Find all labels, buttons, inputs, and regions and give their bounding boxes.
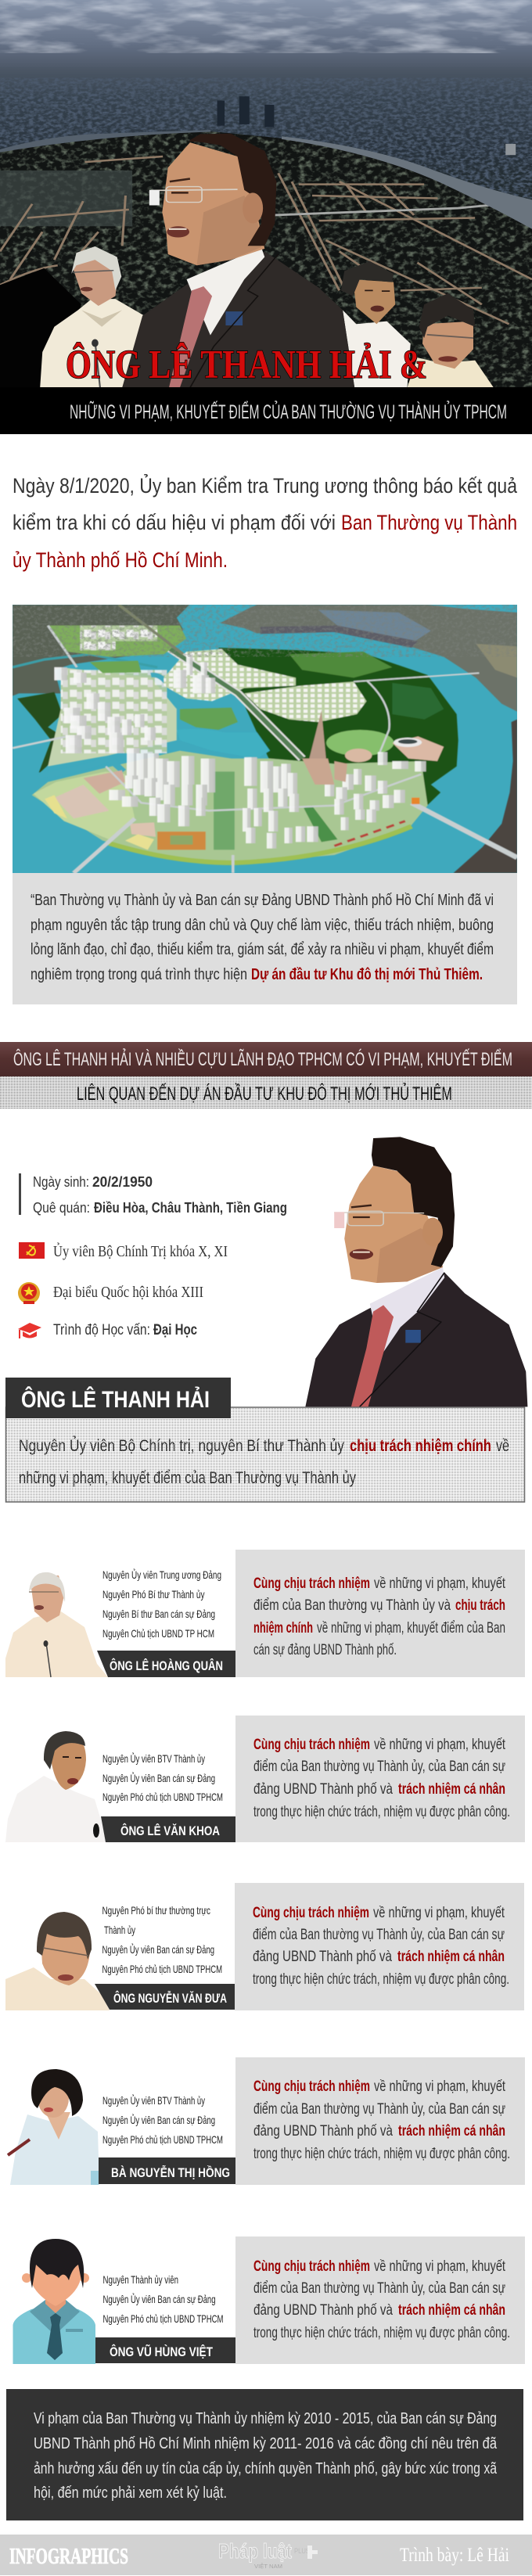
name plate <box>101 1816 235 1842</box>
job titles <box>103 2273 224 2325</box>
person row: Nguyen Van Dua <box>5 1883 524 2010</box>
responsibility panel <box>235 2057 525 2185</box>
job titles <box>102 1904 222 1975</box>
portrait <box>5 1912 110 2010</box>
footer label: INFOGRAPHICS <box>9 2545 128 2569</box>
responsibility panel: Cùng chịu trách nhiệm <box>253 2258 370 2275</box>
politburo text: Ủy viên Bộ Chính Trị khóa X, XI <box>53 1242 228 1260</box>
map: northwest garden district <box>48 626 186 657</box>
quote panel: nghiêm trọng trong quá trình thực hiện <box>31 966 247 983</box>
name plate: Le Thanh Hai <box>5 1378 231 1418</box>
map: southeast park and stadium <box>326 730 394 756</box>
description panel: những vi phạm, khuyết điểm của Ban Thường vụ Thành ủy <box>19 1469 356 1487</box>
job titles <box>102 2093 223 2146</box>
responsibility panel: điểm của Ban thường vụ Thành ủy và <box>253 1597 451 1614</box>
description panel <box>6 1407 524 1502</box>
person row: Vu Hung Viet <box>13 2236 525 2364</box>
map: southwest peninsula <box>34 771 135 839</box>
map: landmark tower <box>302 710 347 785</box>
job titles: Nguyên Phó bí thư thường trực <box>102 1904 210 1917</box>
name plate <box>95 2337 235 2363</box>
map: water channels <box>38 759 124 775</box>
education text: Đại Học <box>153 1322 197 1338</box>
national assembly text: Đại biểu Quốc hội khóa XIII <box>53 1284 203 1301</box>
job titles: Nguyên Ủy viên Ban cán sự Đảng <box>102 2113 215 2126</box>
job titles: Nguyên Phó Bí thư Thành ủy <box>102 1588 205 1601</box>
responsibility panel <box>235 1883 524 2010</box>
responsibility panel: chịu trách <box>455 1597 505 1614</box>
map: roads and bridges <box>13 605 517 873</box>
job titles: Nguyên Thành ủy viên <box>103 2273 178 2286</box>
quote panel <box>13 873 517 1004</box>
logo: PLUS <box>294 2547 310 2555</box>
portrait: Le Van Khoa <box>341 261 411 388</box>
title bar <box>0 387 532 434</box>
conclusion panel <box>6 2389 523 2520</box>
responsibility panel: nhiệm chính <box>253 1620 313 1636</box>
map: south shore planting <box>109 826 412 863</box>
portrait: Le Thanh Hai main <box>305 1137 527 1407</box>
responsibility panel: Cùng chịu trách nhiệm <box>253 1737 370 1753</box>
name plate: ÔNG VŨ HÙNG VIỆT <box>110 2344 213 2359</box>
profile facts: Quê quán: <box>33 1200 90 1216</box>
map: central boulevard <box>171 649 302 759</box>
intro paragraph: kiểm tra khi có dấu hiệu vi phạm đối với <box>13 511 336 534</box>
icon: party flag <box>19 1242 45 1259</box>
job titles: Nguyên Bí thư Ban cán sự Đảng <box>102 1608 215 1620</box>
title: ÔNG LÊ THANH HẢI & <box>66 342 427 387</box>
hero background: river and reclaimed land <box>0 130 532 388</box>
portrait: Le Hoang Quan <box>40 246 144 388</box>
job titles: Nguyên Phó chủ tịch UBND TPHCM <box>102 1791 223 1803</box>
name plate: BÀ NGUYỄN THỊ HỒNG <box>111 2165 230 2180</box>
job titles: Nguyên Ủy viên Ban cán sự Đảng <box>102 1942 214 1956</box>
education text: Trình độ Học vấn: <box>53 1322 150 1338</box>
logo: Pháp luật <box>218 2539 292 2563</box>
name plate <box>97 1651 235 1677</box>
job titles: Nguyên Ủy viên Trung ương Đảng <box>102 1568 221 1581</box>
name plate: Le Thanh Hai: ÔNG LÊ THANH HẢI <box>21 1386 210 1413</box>
profile facts: 20/2/1950 <box>92 1174 153 1190</box>
icon: national emblem <box>18 1282 40 1304</box>
conclusion panel: hội, đến mức phải xem xét kỷ luật. <box>34 2484 227 2502</box>
profile facts <box>19 1173 287 1216</box>
map: southern development ring <box>32 751 428 864</box>
person row: Nguyen Thi Hong <box>8 2057 525 2185</box>
description panel: chịu trách nhiệm chính <box>350 1437 491 1455</box>
responsibility panel: đảng UBND Thành phố và <box>253 1949 392 1965</box>
section heading band <box>0 1042 532 1109</box>
job titles: Nguyên Phó chủ tịch UBND TPHCM <box>103 2312 224 2325</box>
job titles <box>102 1568 221 1640</box>
responsibility panel: Cùng chịu trách nhiệm <box>253 1905 369 1921</box>
responsibility panel: đảng UBND Thành phố và <box>253 2302 393 2319</box>
job titles <box>102 1751 223 1803</box>
portrait <box>5 1572 108 1677</box>
map: northeast port district <box>220 605 517 712</box>
map: garden strip <box>214 771 235 850</box>
responsibility panel: Cùng chịu trách nhiệm <box>253 1575 370 1592</box>
responsibility panel: đảng UBND Thành phố và <box>253 1781 393 1798</box>
job titles: Nguyên Ủy viên Ban cán sự Đảng <box>102 1771 215 1784</box>
hero background: sky and city <box>0 0 532 235</box>
hero banner <box>0 0 532 434</box>
description panel: Nguyên Ủy viên Bộ Chính trị, nguyên Bí thư Thành ủy <box>19 1436 344 1455</box>
responsibility panel <box>235 2236 525 2364</box>
map: west mangrove <box>17 692 63 774</box>
description panel: về <box>496 1437 509 1455</box>
icon: avatar placeholder <box>13 2239 95 2364</box>
job titles: Thành ủy <box>104 1924 135 1936</box>
job titles: Nguyên Phó chủ tịch UBND TPHCM <box>102 2133 223 2146</box>
map: north central district <box>164 649 296 701</box>
map: central lagoon <box>177 729 270 759</box>
map: east neighbourhood <box>244 681 366 722</box>
responsibility panel <box>235 1716 525 1842</box>
map: west district <box>48 667 177 767</box>
job titles: Nguyên Phó chủ tịch UBND TPHCM <box>102 1963 222 1975</box>
portrait: Le Thanh Hai <box>122 134 354 388</box>
map: southeast shore <box>454 720 517 873</box>
profile facts: Điều Hòa, Châu Thành, Tiền Giang <box>94 1200 287 1216</box>
footer <box>0 2535 532 2575</box>
responsibility panel: đảng UBND Thành phố và <box>253 2123 393 2139</box>
project map image: Thu Thiem new urban area <box>13 605 517 873</box>
portrait: Nguyen Van Dua <box>407 293 494 388</box>
name plate <box>99 2157 235 2184</box>
person row: Le Hoang Quan <box>5 1550 525 1677</box>
job titles: Nguyên Ủy viên Ban cán sự Đảng <box>103 2292 216 2305</box>
portrait <box>5 1731 106 1842</box>
responsibility panel: cán sự đảng UBND Thành phố. <box>253 1642 397 1658</box>
profile facts: Ngày sinh: <box>33 1174 89 1190</box>
person row: Le Van Khoa <box>5 1716 525 1842</box>
logo: VIỆT NAM <box>254 2563 282 2570</box>
job titles: Nguyên Ủy viên BTV Thành ủy <box>102 1751 205 1765</box>
portrait <box>8 2069 99 2185</box>
intro paragraph <box>13 472 518 572</box>
job titles: Nguyên Chủ tịch UBND TP HCM <box>102 1627 214 1640</box>
responsibility panel: Cùng chịu trách nhiệm <box>253 2078 370 2095</box>
name plate <box>95 1984 235 2010</box>
name plate: ÔNG LÊ VĂN KHOA <box>120 1823 220 1838</box>
responsibility panel <box>235 1550 525 1677</box>
job titles: Nguyên Ủy viên BTV Thành ủy <box>102 2093 205 2107</box>
name plate: ÔNG LÊ HOÀNG QUÂN <box>110 1658 223 1673</box>
intro paragraph: ủy Thành phố Hồ Chí Minh. <box>13 548 228 572</box>
map: mangrove island <box>218 648 458 808</box>
icon: graduation cap <box>18 1323 41 1338</box>
map: tower blocks <box>54 654 426 849</box>
map: northwest mainland <box>13 605 189 696</box>
name plate: ÔNG NGUYỄN VĂN ĐƯA <box>113 1991 227 2006</box>
